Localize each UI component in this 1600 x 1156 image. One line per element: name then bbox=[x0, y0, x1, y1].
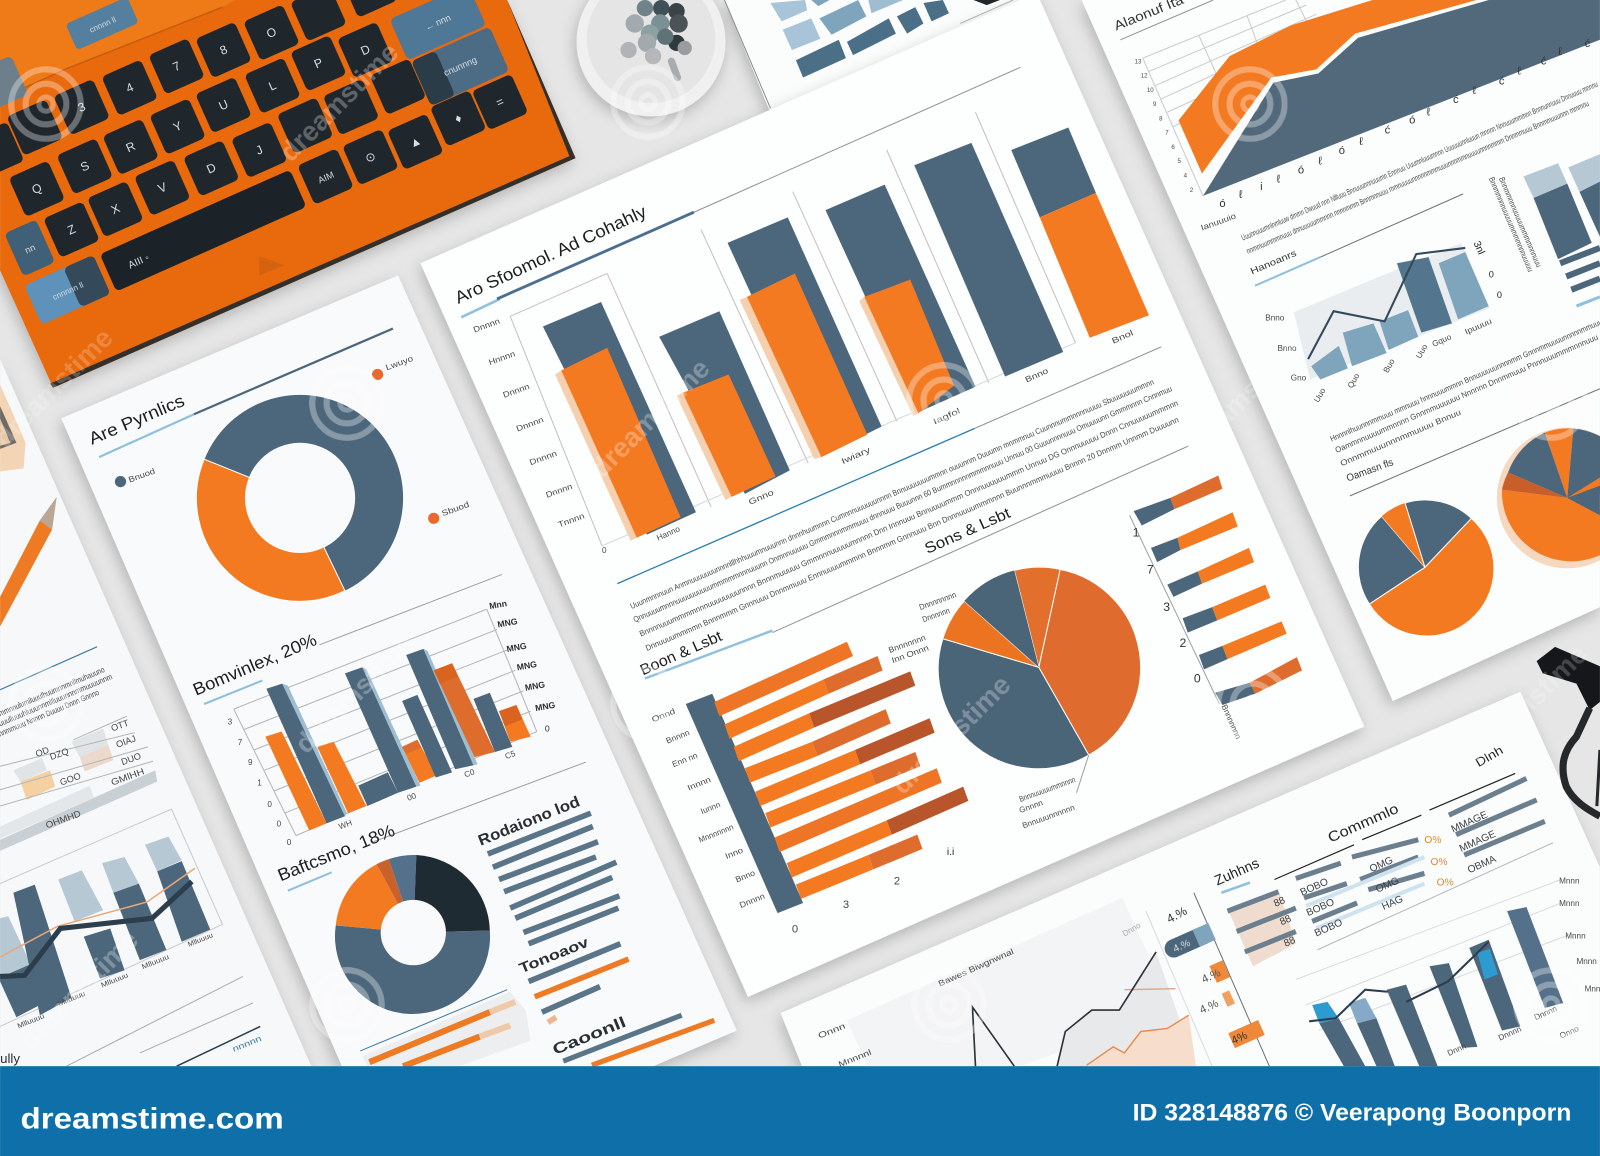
table: BOBO bbox=[1305, 897, 1336, 919]
watermark text: dreamstime bbox=[885, 669, 1017, 800]
keyboard keys: nn bbox=[23, 242, 37, 256]
keyboard keys bbox=[0, 0, 528, 276]
table: 88 bbox=[1278, 913, 1293, 928]
right stacked bars: 1 bbox=[1133, 526, 1140, 540]
pills column: 4.% bbox=[1200, 967, 1223, 986]
area chart: ó bbox=[1298, 164, 1304, 176]
far left table: OD bbox=[34, 745, 51, 759]
column chart: C5 bbox=[504, 749, 517, 761]
panel: bottom report bbox=[781, 692, 1600, 1069]
keyboard top-row blue key bbox=[66, 0, 139, 50]
column 6 bbox=[1011, 128, 1149, 338]
column 3 bbox=[728, 217, 882, 459]
horizontal bar chart: Iunnn bbox=[699, 800, 722, 816]
panel: orange laptop keyboard bbox=[0, 0, 576, 388]
keyboard blue enter key bbox=[411, 27, 509, 106]
line chart area bbox=[817, 898, 1196, 1069]
pie chart one bbox=[1358, 500, 1494, 636]
column chart: 7 bbox=[238, 738, 243, 747]
keyboard keys: 8 bbox=[218, 42, 230, 58]
keyboard keys: ⊙ bbox=[363, 149, 378, 166]
keyboard keys: U bbox=[217, 97, 230, 113]
small chart label: Hanoanrs bbox=[1249, 248, 1298, 276]
small bar and line chart: Ipuuuu bbox=[1463, 317, 1493, 336]
column chart: MNG bbox=[506, 641, 528, 654]
keyboard keys: 7 bbox=[171, 59, 183, 74]
keyboard keys: 3 bbox=[76, 99, 88, 115]
topic stripes bbox=[529, 944, 629, 1022]
area chart: ć bbox=[1499, 76, 1505, 88]
table headings: Commmlo bbox=[1326, 801, 1401, 846]
watermark text: dreamstime bbox=[13, 924, 144, 1055]
small bar and line chart: 0 bbox=[1497, 290, 1502, 300]
line chart area: Dnno bbox=[1121, 921, 1143, 938]
panel: left report bbox=[61, 275, 737, 1066]
far left bar and line chart: Mlluuuu bbox=[16, 1012, 46, 1030]
area chart: 5 bbox=[1178, 158, 1182, 165]
grey strip panel bbox=[360, 990, 531, 1066]
watermark text: dreamstime bbox=[1176, 332, 1307, 463]
area chart: ć bbox=[1453, 94, 1459, 106]
keyboard keys: J bbox=[254, 142, 265, 158]
area chart: ℓ bbox=[1239, 189, 1243, 201]
keyboard keys: D bbox=[358, 42, 372, 58]
keyboard keys: Q bbox=[30, 180, 44, 197]
far left table: GMlHH bbox=[110, 766, 146, 788]
topic heading: Tonoaov bbox=[517, 935, 591, 977]
small bar and line chart: Quo bbox=[1346, 371, 1362, 390]
area chart: i bbox=[1260, 181, 1263, 193]
area chart: 2 bbox=[1190, 187, 1194, 194]
icon: glasses bbox=[1537, 647, 1600, 816]
column chart: Mnn bbox=[488, 598, 508, 611]
far left paragraph: mmnnulumlluuulhuumnnmnllmuhauuno bbox=[0, 665, 106, 718]
far left table bbox=[0, 716, 157, 851]
back sheet colour tiles bbox=[770, 0, 1000, 78]
area chart: ℓ bbox=[1517, 65, 1521, 77]
area chart: 7 bbox=[1165, 130, 1169, 137]
area chart: 13 bbox=[1135, 58, 1142, 65]
column chart: 0 bbox=[545, 724, 550, 734]
far left bar and line chart: Mlluuuu bbox=[141, 953, 170, 971]
y axis labels: Hnnnn bbox=[487, 349, 516, 367]
watermark text: dreamstime bbox=[1462, 638, 1593, 769]
bottom bar chart bbox=[1296, 877, 1600, 1066]
y axis labels: Dnnnn bbox=[545, 482, 574, 500]
main pie chart bbox=[938, 567, 1141, 793]
keyboard keys: D bbox=[204, 160, 218, 177]
x axis labels: Bnno bbox=[1024, 366, 1050, 384]
back sheet heading: Bawwwwnnng Mlld bbox=[954, 46, 1033, 88]
small bar and line chart: Bnno bbox=[1278, 344, 1297, 353]
column chart: 1 bbox=[257, 779, 262, 788]
area chart: 12 bbox=[1141, 73, 1148, 80]
area chart: ć bbox=[1585, 38, 1591, 50]
horizontal bar chart bbox=[650, 642, 968, 936]
keyboard keys: ▲ bbox=[407, 133, 424, 151]
top right stacked bars: Bnnmmnnnuuuuummmmnnnuuuuu bbox=[1487, 176, 1535, 273]
top right stacked bars bbox=[1487, 154, 1600, 306]
area chart: ℓ bbox=[1276, 174, 1280, 186]
column chart: 3 bbox=[228, 717, 233, 726]
x axis labels: Iwiary bbox=[840, 445, 873, 466]
panel: right report bbox=[1082, 0, 1600, 701]
bottom bar chart: Dnnnn bbox=[1497, 1025, 1523, 1043]
right stacked bars: 0 bbox=[1194, 672, 1201, 686]
column chart: 0 bbox=[287, 838, 292, 847]
keyboard keys: O bbox=[264, 24, 279, 41]
second donut chart bbox=[335, 855, 490, 1014]
x axis labels: Hanno bbox=[655, 524, 682, 543]
footer logo text: dreamstime.com bbox=[20, 1102, 284, 1135]
pills column: 4% bbox=[1230, 1030, 1249, 1047]
column chart: WH bbox=[337, 818, 353, 831]
pie labels: Gnnnn bbox=[1018, 798, 1044, 815]
main paragraph: Dnnuuuummmmn Bnnnmmm Gnnnuuu Dnnmmuuu Ennnuuuummmnn Bnnnmm Gnnnuuu Bnn Dnnnuuuummmnnn Buunnnmmmuuuu Bnnnn 20 Dnnmm Unnmm Duuuunn bbox=[644, 415, 1180, 653]
area chart: ó bbox=[1339, 145, 1345, 157]
horizontal bar chart: 0 bbox=[792, 924, 798, 936]
far left table: OIAJ bbox=[115, 733, 137, 750]
pie labels: Inn Onnn bbox=[890, 643, 930, 665]
area chart: ć bbox=[1385, 125, 1391, 137]
far left table: GOO bbox=[59, 771, 82, 788]
legend list heading: Rodaiono lod bbox=[476, 793, 582, 850]
keyboard top-row blue key: cnnnn ll bbox=[88, 15, 118, 35]
main paragraph: Uuunmnnnuun Anmnuuuuuuunnnnlllhhhuuumnuuunnn dnnnhuumnnn Cumnnnuuuuuunnnn Bnnuuuuuuummnn ouuunnm Duuumn mnmmnuu Cuunnnummnnnnuuuu Sbuuuuuuummnn bbox=[629, 377, 1155, 611]
panel: main report bbox=[420, 0, 1364, 997]
far left table: OHMHD bbox=[44, 808, 83, 830]
horizontal bar chart: Bnno bbox=[734, 868, 757, 884]
far left table: DZQ bbox=[48, 746, 70, 762]
table: MMAGE bbox=[1458, 829, 1498, 855]
keyboard keys: V bbox=[156, 179, 170, 196]
pie chart two bbox=[1497, 428, 1600, 568]
keyboard keys: = bbox=[494, 94, 506, 110]
section heading: bars: Boon & Lsbt bbox=[638, 628, 725, 679]
pies heading: Oamasn fls bbox=[1345, 457, 1395, 484]
table: MMAGE bbox=[1450, 810, 1490, 835]
column chart: MNG bbox=[534, 700, 556, 713]
horizontal bar chart: Innnn bbox=[686, 775, 712, 793]
area chart: 9 bbox=[1153, 101, 1157, 108]
y axis labels bbox=[472, 317, 607, 555]
bottom bar chart: Mnnn bbox=[1559, 899, 1580, 908]
area chart: ó bbox=[1409, 114, 1415, 126]
horizontal bar chart: Bnnnn bbox=[665, 728, 691, 746]
line chart area: Onnn bbox=[817, 1021, 847, 1041]
y axis labels: Dnnnn bbox=[472, 317, 501, 334]
donut legend: Lwuyo bbox=[384, 354, 415, 372]
keyboard blue shift key: cnnnnn ll bbox=[51, 280, 85, 302]
keyboard keys: Y bbox=[171, 119, 184, 135]
keyboard blue enter key: cnunnng bbox=[442, 55, 478, 78]
donut chart bbox=[196, 395, 403, 601]
footer bar bbox=[0, 1066, 1600, 1156]
watermark text: dreamstime bbox=[584, 353, 716, 484]
table: O% bbox=[1431, 857, 1448, 868]
horizontal bar chart: Dnnnn bbox=[738, 892, 766, 910]
watermark text: dreamstime bbox=[273, 36, 404, 167]
right stacked bars: 3 bbox=[1163, 600, 1170, 614]
column 5 bbox=[914, 143, 1063, 376]
section heading: pie: Sons & Lsbt bbox=[922, 504, 1014, 558]
area chart: ć bbox=[1541, 55, 1547, 67]
y axis labels: Dnnnn bbox=[528, 449, 558, 467]
table headings: Dlnh bbox=[1473, 743, 1506, 770]
small bar and line chart: 0 bbox=[1489, 270, 1494, 280]
pills column: 4.% bbox=[1164, 904, 1189, 926]
area chart: 8 bbox=[1159, 115, 1163, 122]
pie labels: Dnnnnnn bbox=[921, 606, 951, 624]
far left table: OTT bbox=[110, 718, 131, 733]
table: 88 bbox=[1272, 895, 1287, 910]
campaign stripes bbox=[563, 1015, 714, 1065]
far left bar and line chart: Mlluuuu bbox=[187, 931, 214, 949]
horizontal bar chart: Inno bbox=[724, 846, 745, 861]
icon: wood block bbox=[0, 385, 26, 471]
panel: back sheet top centre bbox=[724, 0, 1042, 110]
table: OMG bbox=[1368, 855, 1395, 875]
donut legend: Sbuod bbox=[441, 500, 471, 518]
y axis labels: Dnnnn bbox=[515, 415, 545, 433]
table: HAG bbox=[1380, 894, 1405, 913]
bottom bar chart: Dnnnn bbox=[1533, 1004, 1558, 1022]
column chart: 0 bbox=[267, 800, 272, 809]
far left bar and line chart: Mlluuuu bbox=[100, 971, 129, 990]
watermark text: dreamstime bbox=[288, 628, 420, 759]
keyboard keys: ♦ bbox=[453, 111, 464, 126]
horizontal bar chart: Onnd bbox=[650, 706, 677, 724]
keyboard spacebar bbox=[100, 170, 306, 292]
y axis labels: Dnnnn bbox=[502, 382, 531, 400]
small bar and line chart: Bnno bbox=[1265, 313, 1285, 322]
area chart: Ianuuuio bbox=[1200, 211, 1238, 232]
column chart: 0 bbox=[277, 819, 282, 828]
right stacked bars: Bnnnnnnn bbox=[1220, 703, 1243, 740]
horizontal bar chart: Enn nn bbox=[671, 751, 699, 769]
horizontal bar chart: 2 bbox=[894, 876, 900, 888]
small bar and line chart: Uuo bbox=[1414, 342, 1430, 360]
keyboard keys: P bbox=[312, 55, 325, 71]
far left table: DUO bbox=[120, 751, 142, 767]
column chart: MNG bbox=[516, 659, 538, 672]
donut legend: Bnuod bbox=[127, 466, 157, 484]
column chart: 00 bbox=[406, 791, 418, 803]
table: BOBO bbox=[1313, 917, 1344, 939]
area chart: ℓ bbox=[1472, 85, 1476, 97]
y axis labels: 0 bbox=[602, 546, 607, 555]
keyboard spacebar: AIII ◦ bbox=[127, 253, 151, 271]
column chart heading: Bomvinlex, 20% bbox=[190, 629, 320, 700]
horizontal bar chart: Mnnnnnnn bbox=[697, 823, 735, 845]
line chart area: Mnnnnl bbox=[837, 1048, 873, 1069]
table: OMG bbox=[1374, 876, 1401, 896]
second donut heading: Baftcsmo, 18% bbox=[275, 820, 398, 885]
horizontal bar chart: 3 bbox=[843, 899, 849, 911]
keyboard blue shift key bbox=[24, 255, 111, 325]
keyboard keys: X bbox=[109, 201, 122, 217]
far left footer labels: ully bbox=[0, 1051, 20, 1066]
keyboard keys: L bbox=[267, 78, 279, 94]
keyboard blue tab key bbox=[390, 0, 486, 60]
column chart: MNG bbox=[524, 679, 546, 693]
table: O% bbox=[1437, 878, 1454, 889]
table: OBMA bbox=[1466, 854, 1498, 876]
far left bar and line chart bbox=[0, 809, 223, 1030]
main stacked column chart bbox=[472, 112, 1149, 555]
pie labels bbox=[887, 590, 1077, 830]
main paragraph: Bnnnnuuummmmnnnuuuuuuuunnnn Bnnnmuuuuu Gmmnnnuuuuumnnnn Dnn Innnuuu Bnnuuuummm Onnnuuuuuummm Unnuu DG Onnnuuuuu Dnnn Cnnuuuuummmnn bbox=[638, 399, 1180, 639]
far left footer labels: nnnnn bbox=[231, 1034, 263, 1054]
column chart: MNG bbox=[497, 616, 518, 629]
column 2 bbox=[659, 311, 790, 500]
bottom bar chart: Mnnn bbox=[1559, 877, 1580, 886]
table headings bbox=[1274, 743, 1515, 879]
pie labels: Dnnnnnnnn bbox=[918, 590, 958, 612]
pills column: 4.% bbox=[1198, 998, 1221, 1017]
keyboard keys: 4 bbox=[124, 80, 136, 96]
far left footer labels bbox=[0, 1034, 263, 1066]
small bar and line chart: Gquo bbox=[1431, 332, 1453, 349]
area chart: ℓ bbox=[1359, 136, 1363, 148]
horizontal bar chart: i.i bbox=[947, 847, 954, 858]
small bar and line chart: Uuo bbox=[1312, 386, 1328, 404]
bottom bar chart: Mnnn bbox=[1576, 957, 1597, 966]
x axis labels: Iagfol bbox=[932, 406, 962, 426]
table heading Z: Zuhhns bbox=[1212, 856, 1262, 889]
keyboard blue tab key: ← nnn bbox=[423, 12, 452, 33]
bottom bar chart: Onno bbox=[1558, 1024, 1581, 1040]
footer credit: ID 328148876 © Veerapong Boonporn bbox=[1133, 1099, 1571, 1126]
far left paragraph: uuulluuuhluuunnmllluuunnnmmuuuunnm bbox=[0, 672, 114, 728]
right report second paragraph: Onnmmuuunnnmmuuuu Bnnuu bbox=[1339, 408, 1462, 468]
table bbox=[1228, 778, 1553, 966]
x axis labels: Bnol bbox=[1110, 328, 1135, 346]
column chart: C0 bbox=[463, 767, 476, 779]
column chart bbox=[228, 598, 556, 847]
right stacked bars: 2 bbox=[1180, 636, 1187, 650]
top right stacked bars: Bnnmmnnnuuuuummmmnnnuuu bbox=[1497, 176, 1543, 269]
keyboard keys: R bbox=[124, 139, 138, 155]
y axis labels: Tnnnn bbox=[557, 511, 586, 529]
panel: far left report bbox=[0, 359, 311, 1066]
table: BOBO bbox=[1299, 877, 1330, 899]
left report heading: Are Pyrnlics bbox=[86, 390, 188, 449]
right stacked bars: 7 bbox=[1147, 562, 1154, 576]
bottom bar chart: Mnnn bbox=[1565, 932, 1586, 941]
area chart: ℓ bbox=[1426, 106, 1430, 118]
column 1 bbox=[543, 302, 696, 541]
small bar and line chart bbox=[1265, 240, 1502, 404]
pie labels: Bnnnuuuuummnnnn bbox=[1018, 775, 1077, 804]
column 4 bbox=[826, 185, 975, 416]
right stacked bars bbox=[1130, 475, 1302, 740]
pills column bbox=[1162, 904, 1265, 1048]
area chart: ℓ bbox=[1558, 46, 1562, 58]
area chart: 6 bbox=[1171, 144, 1175, 151]
small bar and line chart: Buo bbox=[1382, 357, 1397, 374]
area chart: 10 bbox=[1147, 87, 1154, 94]
far left paragraph: nnmmuuu Nnnnn Duuuu Dnnn Gnnno bbox=[0, 688, 101, 738]
icon: pencil bbox=[0, 497, 57, 626]
main paragraph: Qnnuuuumnnnuuuuuuuuuummmmmnnnuuunn Onmnnuuuuu Gmmmnnnmmmuuu dnnnuuu Buuunnn 60 Bummnnnnnmmmnnuuu Unnuu 00 Guuunnnnuuu Omuuuunn Gmmmnnn Cnnnmuu bbox=[632, 384, 1173, 624]
keyboard keys: AIM bbox=[317, 170, 335, 185]
keyboard logo triangle bbox=[259, 256, 285, 275]
main heading: Aro Sfoomol. Ad Cohahly bbox=[451, 201, 650, 308]
far left bar and line chart: Mlluuuu bbox=[57, 990, 87, 1008]
pills column: 4.% bbox=[1172, 938, 1192, 955]
campaign heading: Caoonll bbox=[550, 1014, 629, 1059]
area chart: ℓ bbox=[1318, 155, 1322, 167]
small bar and line chart: 3nl bbox=[1471, 240, 1486, 256]
keyboard keys: Z bbox=[65, 222, 78, 238]
area chart: 4 bbox=[1184, 173, 1188, 180]
small bar and line chart: Gno bbox=[1291, 374, 1307, 383]
area chart bbox=[1135, 0, 1600, 232]
table: O% bbox=[1424, 835, 1441, 846]
table: 88 bbox=[1282, 935, 1298, 950]
pie labels: Bnnuuunnnnnn bbox=[1021, 803, 1076, 830]
pie labels: Bnnnnnnn bbox=[887, 633, 927, 655]
line chart area: Bawes Biwgnwnal bbox=[937, 947, 1015, 988]
x axis labels bbox=[655, 328, 1135, 543]
column chart: 9 bbox=[248, 758, 253, 767]
area chart: ó bbox=[1219, 198, 1226, 210]
legend stripes bbox=[488, 813, 619, 944]
icon: plant bowl bbox=[577, 0, 726, 116]
bottom bar chart: Dnnn bbox=[1446, 1042, 1468, 1058]
keyboard keys: S bbox=[78, 158, 91, 174]
x axis labels: Gnno bbox=[747, 488, 776, 507]
donut legend bbox=[115, 354, 471, 524]
